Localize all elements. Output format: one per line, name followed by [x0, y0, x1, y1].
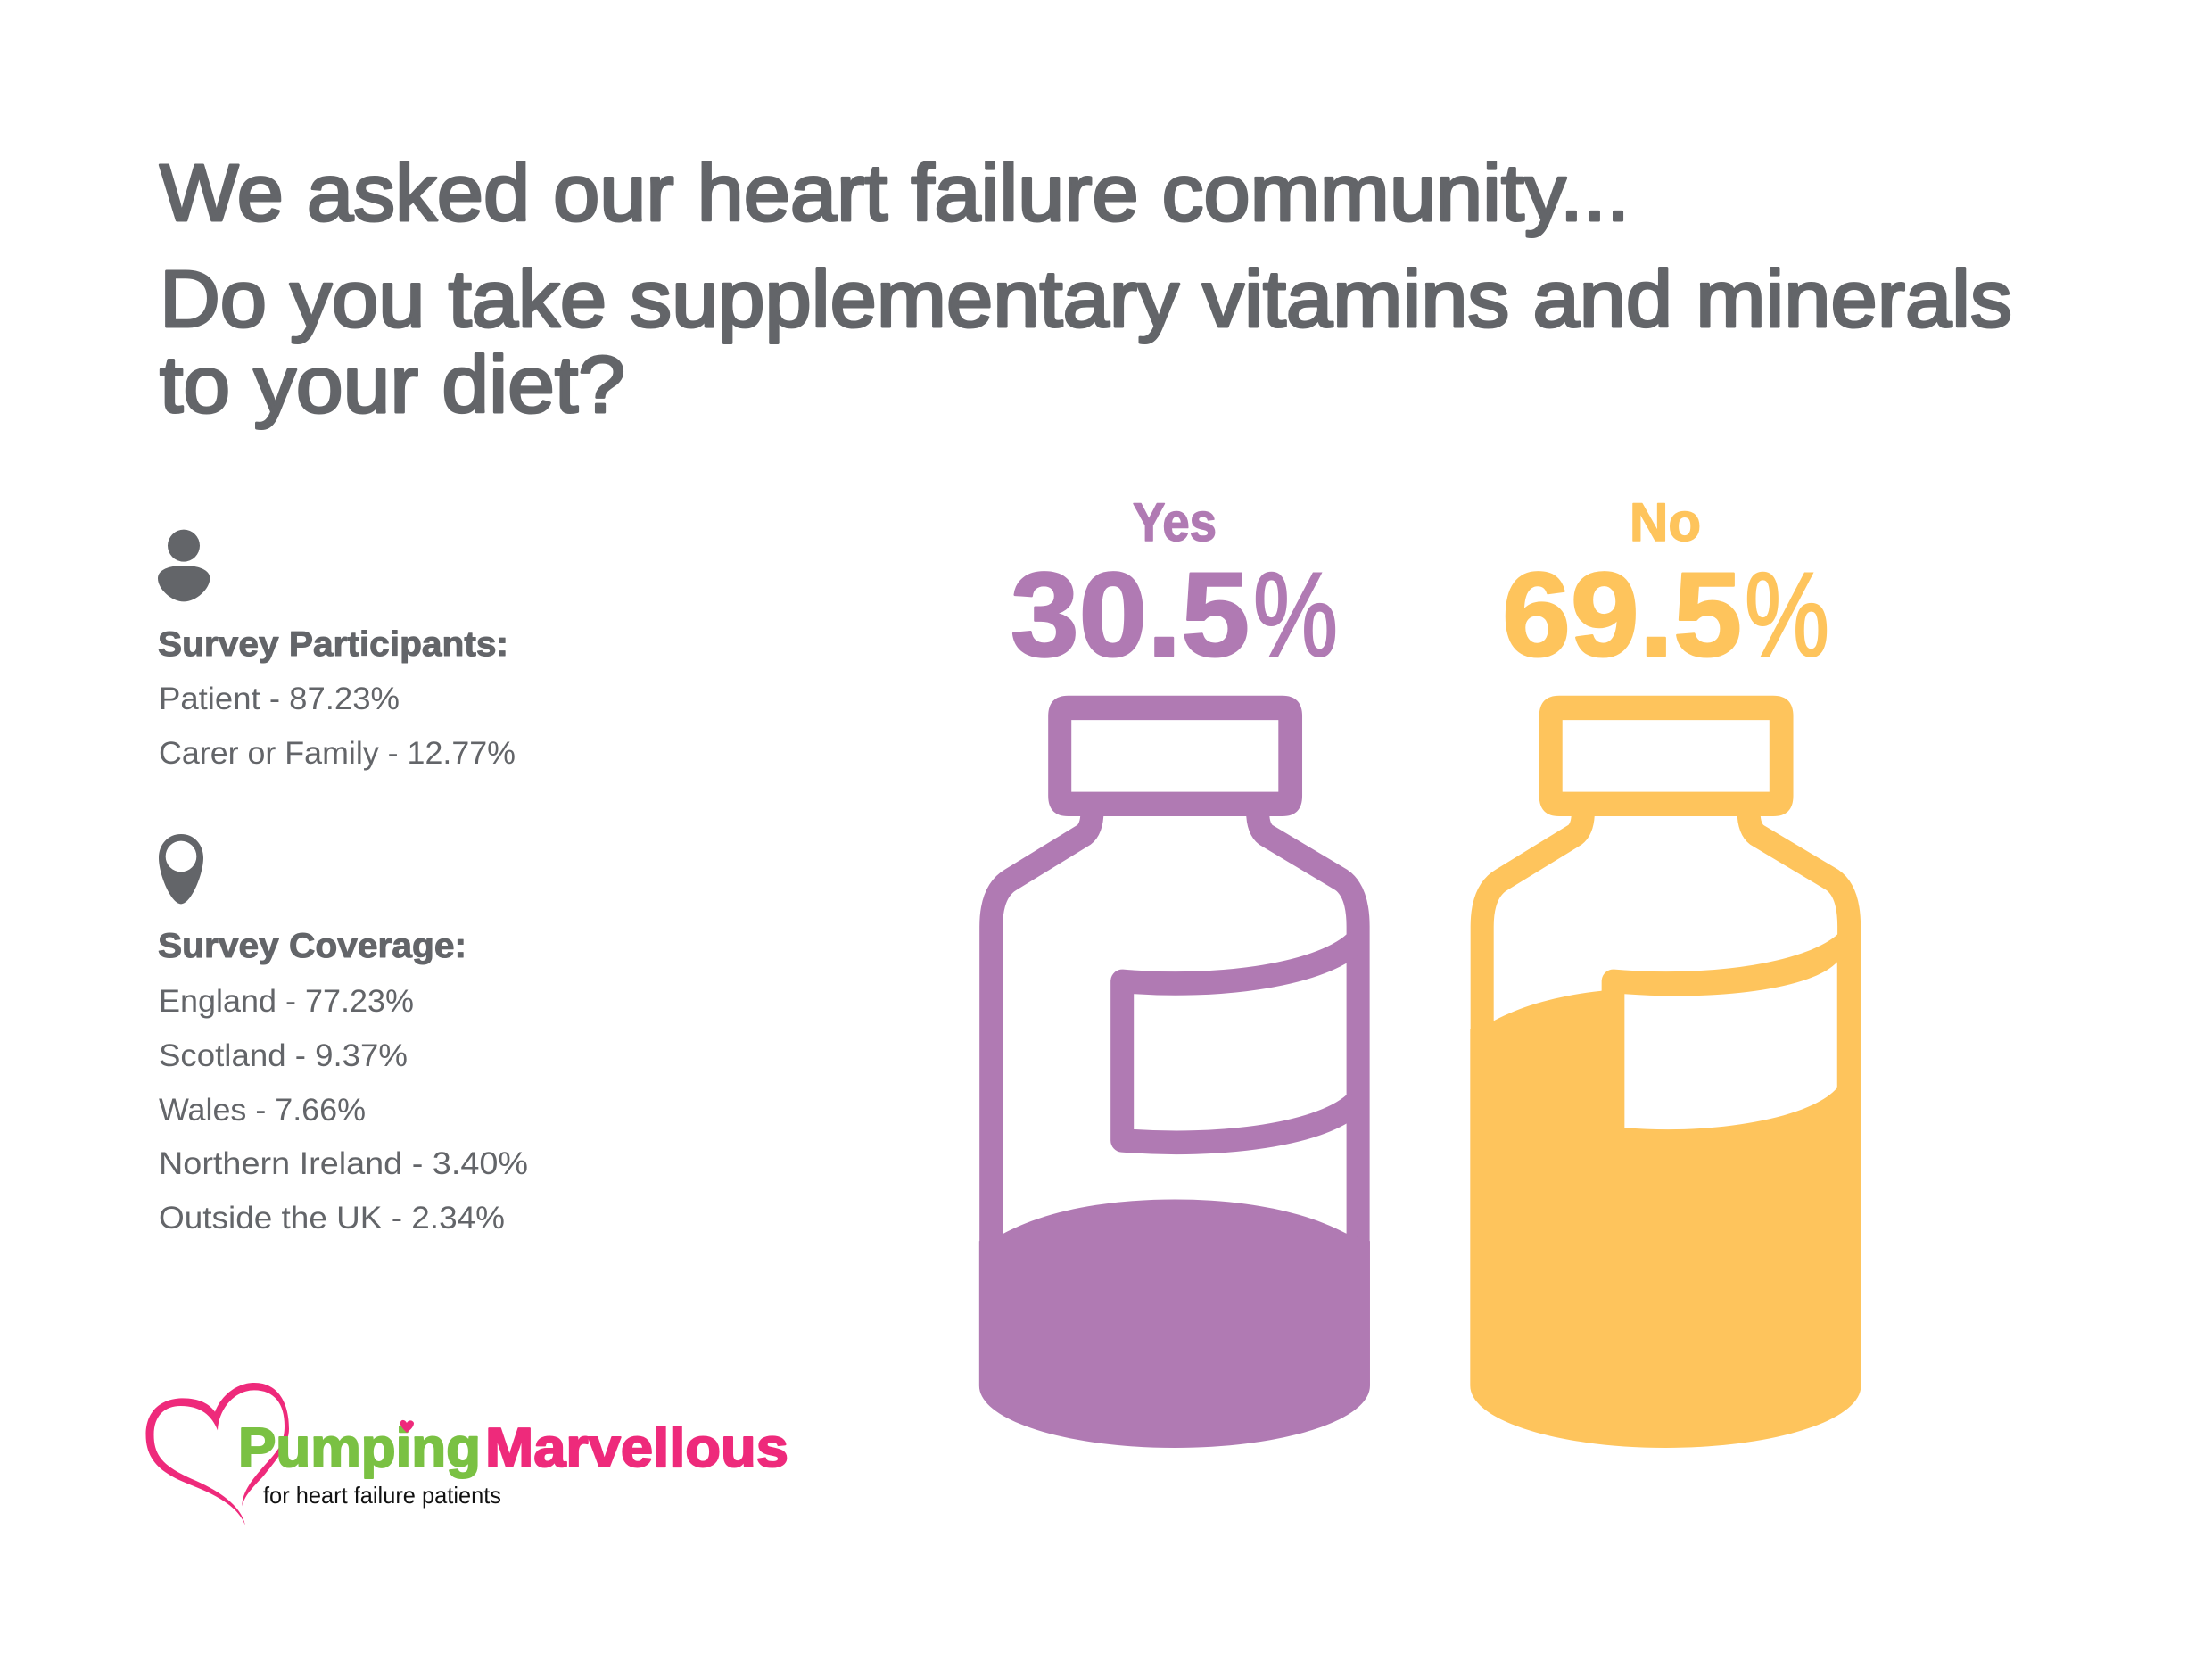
coverage row: Scotland: Scotland - 9.37%	[159, 1038, 408, 1073]
participant row: patient: Patient - 87.23%	[159, 682, 400, 716]
wordmark: Marvellous: Marvellous	[485, 1418, 788, 1479]
bottle: yes, about 30 percent full	[979, 696, 1370, 1448]
liquid level	[979, 1200, 1370, 1448]
value: 30.5%: %	[1253, 549, 1338, 682]
label: yes: Yes	[1133, 492, 1217, 552]
bottle label edge	[1614, 939, 1849, 1013]
value: 69.5%: 69.5	[1502, 549, 1742, 682]
panel: survey participants	[158, 530, 516, 771]
panel: no result	[1470, 492, 1861, 1448]
title line 3: to your diet?	[160, 341, 625, 430]
bottle: no, about 70 percent full	[1470, 696, 1861, 1448]
bottle outline	[1482, 811, 1849, 1385]
icon: person	[158, 530, 210, 601]
icon: heart outline	[146, 1383, 289, 1525]
panel: survey coverage	[158, 834, 528, 1236]
icon: small heart over the i	[400, 1420, 414, 1433]
heading: survey participants: Survey Participants:	[158, 625, 508, 664]
coverage row: England: England - 77.23%	[159, 984, 414, 1019]
bottle label	[1122, 939, 1358, 1143]
bottle label window	[1624, 962, 1837, 1129]
title line 2: Do you take supplementary vitamins and minerals	[160, 255, 2012, 344]
bottle cap	[1048, 696, 1302, 816]
label: no: No	[1630, 492, 1701, 552]
coverage row: Outside the UK: Outside the UK - 2.34%	[159, 1201, 505, 1236]
coverage row: Wales: Wales - 7.66%	[159, 1093, 366, 1128]
value: 69.5%: %	[1745, 549, 1829, 682]
bottle cap	[1539, 696, 1794, 816]
participant row: carer: Carer or Family - 12.77%	[159, 736, 516, 771]
value: 30.5%: 30.5	[1011, 549, 1250, 682]
icon: map pin	[159, 834, 203, 904]
panel: yes result	[979, 492, 1370, 1448]
title	[160, 149, 2012, 430]
wordmark: Pumping: Pumping	[238, 1418, 481, 1479]
heading: survey coverage: Survey Coverage:	[158, 927, 466, 965]
bottle outline	[991, 811, 1358, 1385]
logo: Pumping Marvellous	[146, 1383, 788, 1525]
coverage row: Northern Ireland: Northern Ireland - 3.40%	[159, 1146, 528, 1181]
liquid level	[1470, 939, 1861, 1448]
tagline: for heart failure patients	[263, 1482, 501, 1509]
title line 1: We asked our heart failure community...	[160, 149, 1630, 238]
